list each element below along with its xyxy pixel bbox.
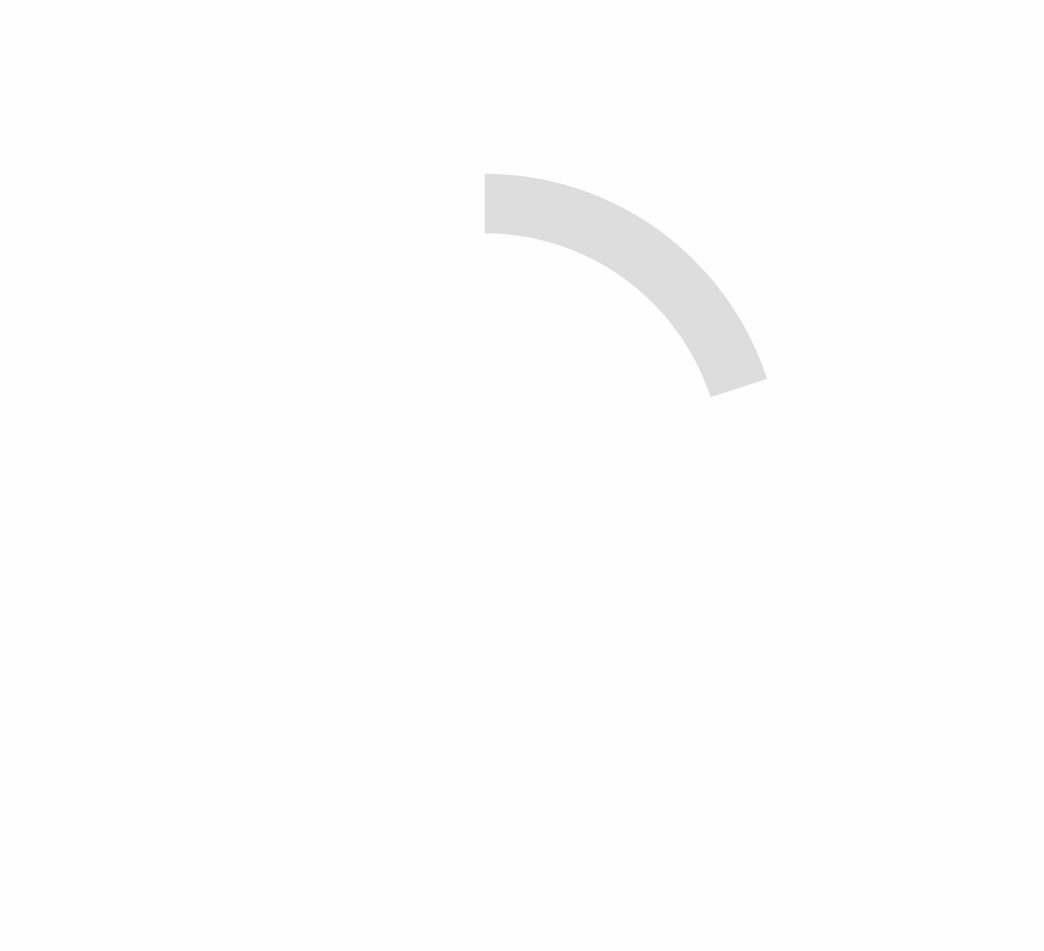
chart: gray donut arc segment [485,174,767,397]
